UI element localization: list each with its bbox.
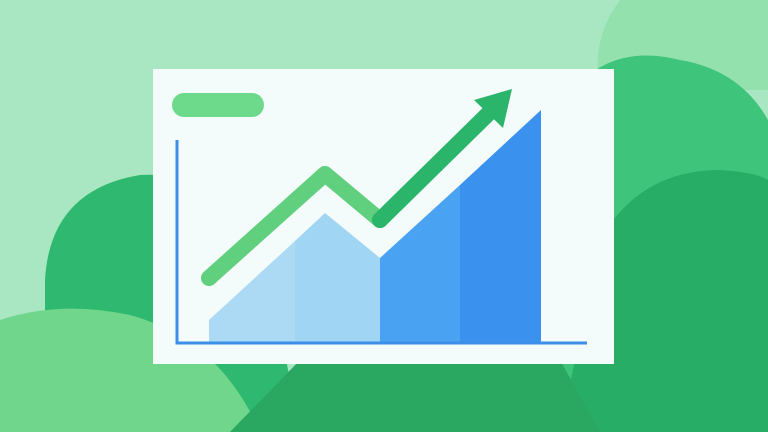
trend arrow — [209, 89, 512, 278]
axes — [177, 140, 587, 343]
area chart — [209, 110, 541, 343]
card — [153, 69, 614, 364]
pill label — [172, 93, 264, 117]
